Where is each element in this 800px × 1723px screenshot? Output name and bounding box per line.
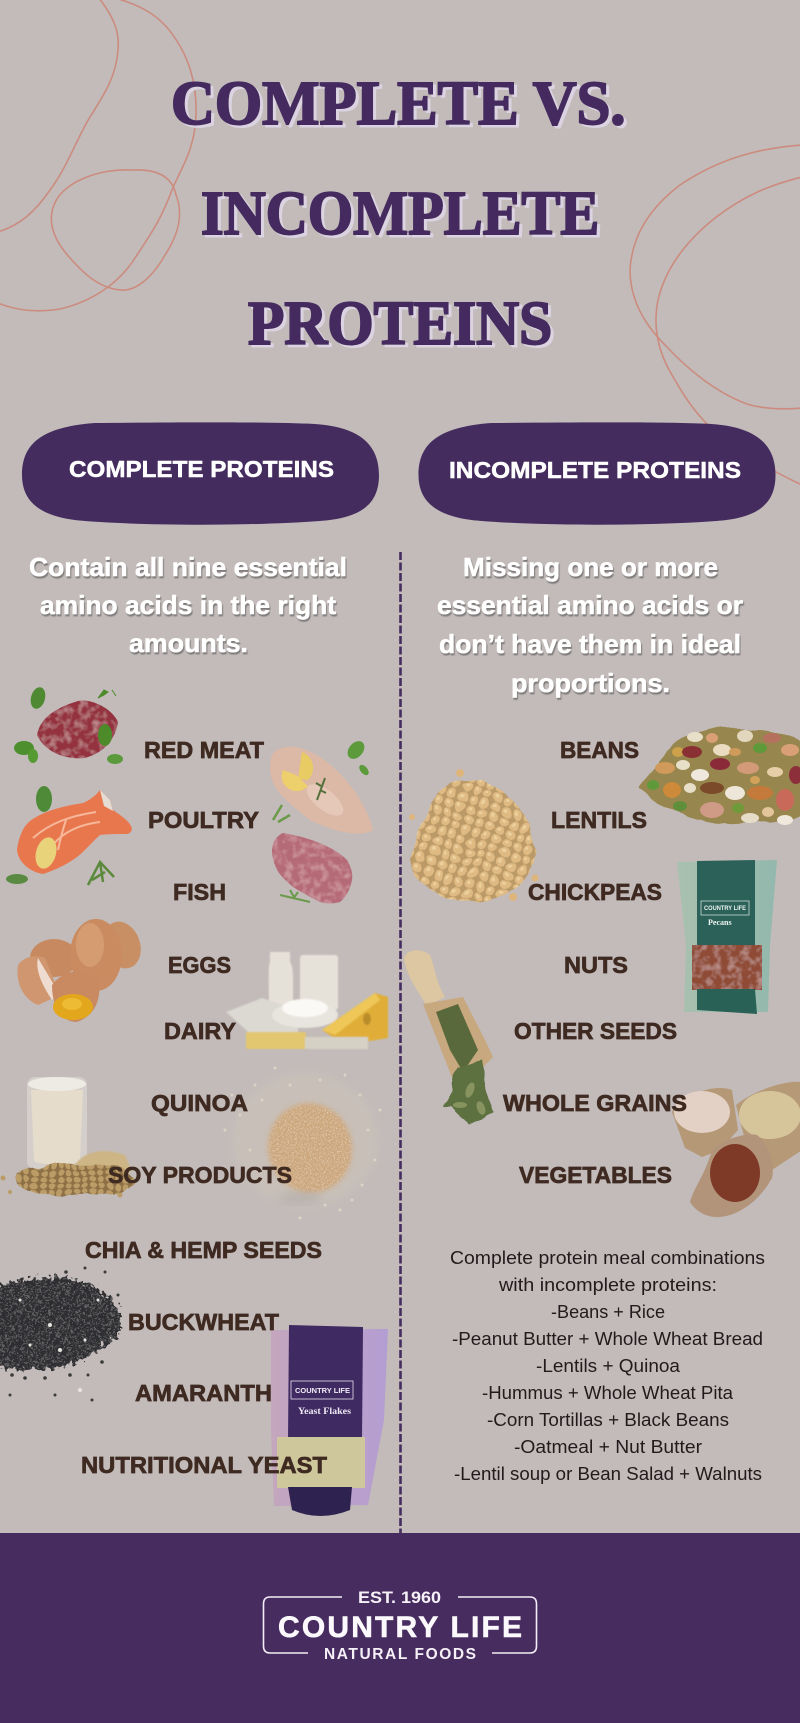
icon: chickpeas bbox=[409, 769, 538, 903]
food labels: complete proteins: EGGS bbox=[168, 952, 231, 978]
title: PROTEINS bbox=[248, 290, 552, 358]
incomplete proteins description bbox=[437, 552, 743, 698]
footer band bbox=[0, 1533, 800, 1723]
meal combinations text: Complete protein meal combinations bbox=[450, 1247, 765, 1268]
icon: salmon bbox=[6, 786, 132, 885]
icon: scoop with seeds bbox=[404, 950, 493, 1124]
icon: pecans pouch: COUNTRY LIFE bbox=[704, 906, 746, 912]
complete proteins description: amino acids in the right bbox=[40, 590, 336, 620]
incomplete proteins description: proportions. bbox=[511, 668, 670, 698]
title: COMPLETE VS. bbox=[171, 69, 626, 138]
meal combinations text: -Lentils + Quinoa bbox=[536, 1355, 681, 1376]
food labels: incomplete proteins: NUTS bbox=[564, 952, 628, 978]
food labels: incomplete proteins: OTHER SEEDS bbox=[514, 1018, 677, 1044]
icon: grain sacks bbox=[672, 1082, 800, 1217]
meal combinations text: -Beans + Rice bbox=[551, 1301, 665, 1322]
food labels: complete proteins: BUCKWHEAT bbox=[128, 1309, 280, 1335]
icon: chia seeds bbox=[0, 1266, 121, 1402]
icon: red meat bbox=[14, 686, 123, 764]
meal combinations text: -Oatmeal + Nut Butter bbox=[514, 1436, 702, 1457]
food labels: complete proteins: POULTRY bbox=[148, 807, 259, 833]
food labels: complete proteins: CHIA & HEMP SEEDS bbox=[85, 1237, 322, 1263]
incomplete proteins description: essential amino acids or bbox=[437, 590, 743, 620]
panel heading: complete proteins bbox=[22, 422, 379, 525]
icon: chicken breast bbox=[270, 738, 373, 834]
panel heading: complete proteins: COMPLETE PROTEINS bbox=[69, 456, 334, 482]
icon: pecans pouch: Pecans bbox=[708, 918, 732, 927]
meal combinations text: -Hummus + Whole Wheat Pita bbox=[482, 1382, 734, 1403]
food labels: incomplete proteins: VEGETABLES bbox=[519, 1162, 672, 1188]
decorative curves right bbox=[630, 145, 800, 485]
food labels: incomplete proteins: WHOLE GRAINS bbox=[503, 1090, 687, 1116]
title: INCOMPLETE bbox=[201, 179, 599, 248]
logo: Country Life: EST. 1960 bbox=[358, 1589, 441, 1607]
food labels: complete proteins: DAIRY bbox=[164, 1018, 236, 1044]
icon: yeast flakes pouch: Yeast Flakes bbox=[298, 1406, 352, 1416]
icon: pecans pouch bbox=[677, 860, 777, 1014]
icon: quinoa bbox=[224, 1066, 382, 1220]
logo: Country Life: NATURAL FOODS bbox=[324, 1646, 476, 1663]
icon: milk and soybeans bbox=[0, 1077, 133, 1198]
center divider bbox=[399, 552, 402, 1533]
food labels: complete proteins: NUTRITIONAL YEAST bbox=[81, 1452, 328, 1478]
food labels: incomplete proteins bbox=[503, 737, 687, 1188]
meal combinations text: with incomplete proteins: bbox=[498, 1274, 717, 1295]
meal combinations text bbox=[450, 1247, 765, 1484]
logo: Country Life: COUNTRY LIFE bbox=[278, 1611, 522, 1644]
complete proteins description: amounts. bbox=[129, 628, 248, 658]
food labels: complete proteins: SOY PRODUCTS bbox=[108, 1162, 292, 1188]
food labels: complete proteins: FISH bbox=[173, 879, 226, 905]
complete proteins description: Contain all nine essential bbox=[29, 552, 347, 582]
icon: yeast flakes pouch: COUNTRY LIFE bbox=[295, 1386, 350, 1395]
icon: eggs bbox=[17, 916, 147, 1022]
icon: yeast flakes pouch bbox=[271, 1325, 388, 1516]
food labels: complete proteins: AMARANTH bbox=[135, 1380, 272, 1406]
food labels: complete proteins bbox=[81, 737, 328, 1478]
food labels: incomplete proteins: LENTILS bbox=[551, 807, 647, 833]
title bbox=[171, 69, 626, 358]
incomplete proteins description: don’t have them in ideal bbox=[439, 629, 741, 659]
food labels: complete proteins: QUINOA bbox=[151, 1090, 248, 1116]
complete proteins description bbox=[29, 552, 347, 658]
incomplete proteins description: Missing one or more bbox=[463, 552, 718, 582]
icon: beans bbox=[640, 727, 800, 825]
food labels: complete proteins: RED MEAT bbox=[144, 737, 265, 763]
meal combinations text: -Lentil soup or Bean Salad + Walnuts bbox=[454, 1463, 762, 1484]
logo: Country Life bbox=[264, 1589, 536, 1663]
icon: dairy bbox=[226, 952, 388, 1049]
meal combinations text: -Corn Tortillas + Black Beans bbox=[487, 1409, 729, 1430]
meal combinations text: -Peanut Butter + Whole Wheat Bread bbox=[452, 1328, 763, 1349]
icon: pork steak bbox=[272, 833, 352, 904]
decorative curves left bbox=[0, 0, 196, 311]
panel heading: incomplete proteins bbox=[418, 422, 776, 525]
food labels: incomplete proteins: CHICKPEAS bbox=[528, 879, 662, 905]
panel heading: incomplete proteins: INCOMPLETE PROTEINS bbox=[449, 457, 741, 483]
food labels: incomplete proteins: BEANS bbox=[560, 737, 639, 763]
